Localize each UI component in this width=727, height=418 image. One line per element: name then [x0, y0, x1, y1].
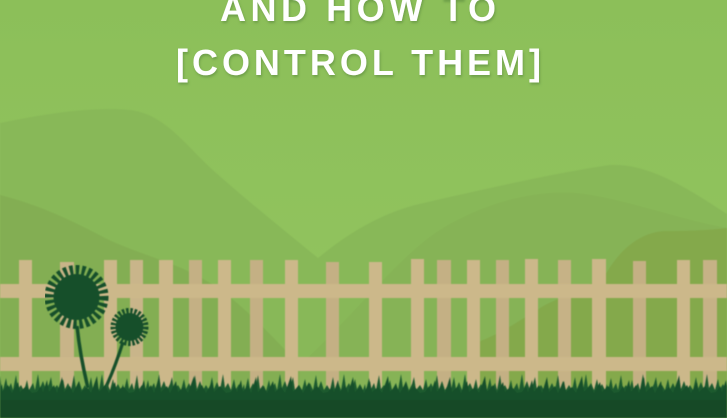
fence posts	[19, 259, 717, 395]
picket fence	[0, 259, 727, 395]
near hill right	[470, 228, 727, 418]
dandelions	[50, 270, 146, 389]
middle mountains right	[300, 193, 727, 418]
middle mountains left	[0, 195, 300, 418]
title	[176, 0, 541, 83]
grass	[0, 370, 727, 418]
far mountains	[0, 109, 727, 418]
title line: control them: [CONTROL THEM]	[176, 42, 541, 83]
large dandelion	[50, 270, 103, 388]
fence rails	[0, 284, 727, 371]
small dandelion	[105, 311, 146, 389]
